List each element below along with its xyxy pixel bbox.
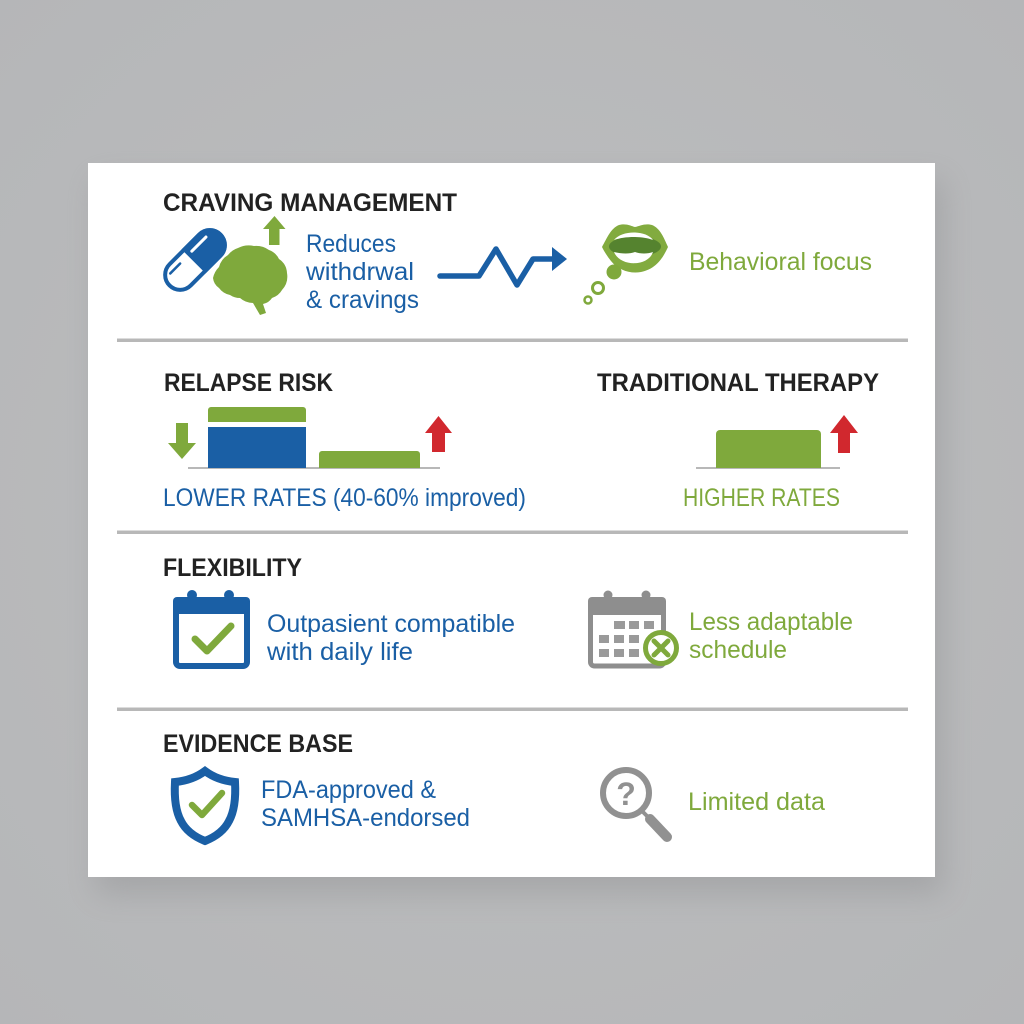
heading: relapse risk: RELAPSE RISK — [164, 369, 333, 397]
text: reduces withdrawal: & cravings — [306, 286, 419, 314]
icon: brain — [213, 245, 287, 315]
text: reduces withdrawal: withdrwal — [305, 258, 414, 286]
icon: calendar x — [588, 590, 676, 666]
text: reduces withdrawal — [305, 230, 419, 314]
icon: magnifier question — [603, 770, 667, 837]
text: outpatient compatible: Outpasient compatible — [267, 610, 515, 638]
bar chart: medication vs therapy — [188, 407, 440, 469]
text: fda approved: SAMHSA-endorsed — [261, 804, 470, 832]
icon: lips thought bubble — [584, 224, 668, 304]
panel: card — [88, 163, 935, 877]
icon: calendar check — [173, 590, 250, 666]
text: less adaptable: schedule — [689, 636, 787, 664]
heading: flexibility: FLEXIBILITY — [163, 554, 302, 582]
icon: capsule — [159, 224, 231, 296]
text: fda approved: FDA-approved & — [261, 776, 436, 804]
icon: shield check — [175, 771, 235, 841]
panel: evidence base — [163, 730, 825, 841]
icon: magnifier question: ? — [616, 776, 636, 812]
icon: down arrow — [168, 423, 196, 459]
panel: relapse risk — [163, 369, 879, 512]
text: outpatient compatible: with daily life — [266, 638, 413, 666]
panel: flexibility — [163, 554, 853, 666]
panel: craving management — [159, 189, 872, 315]
text: behavioral focus: Behavioral focus — [689, 248, 872, 276]
text: reduces withdrawal: Reduces — [306, 230, 396, 258]
icon: red up arrow right — [830, 415, 858, 453]
text: less adaptable: Less adaptable — [689, 608, 853, 636]
heading: evidence base: EVIDENCE BASE — [163, 730, 353, 758]
text: outpatient compatible — [266, 610, 515, 666]
bar chart: traditional therapy — [696, 430, 840, 469]
text: limited data: Limited data — [688, 788, 825, 816]
icon: up arrow — [263, 216, 286, 245]
text: less adaptable — [689, 608, 853, 664]
text: higher rates: HIGHER RATES — [683, 484, 840, 512]
icon: red up arrow — [425, 416, 452, 452]
heading: craving management: CRAVING MANAGEMENT — [163, 189, 457, 217]
heading: traditional therapy: TRADITIONAL THERAPY — [597, 369, 879, 397]
text: fda approved — [261, 776, 470, 832]
arrow: zigzag — [440, 247, 567, 285]
text: lower rates: LOWER RATES (40-60% improved) — [163, 484, 526, 512]
